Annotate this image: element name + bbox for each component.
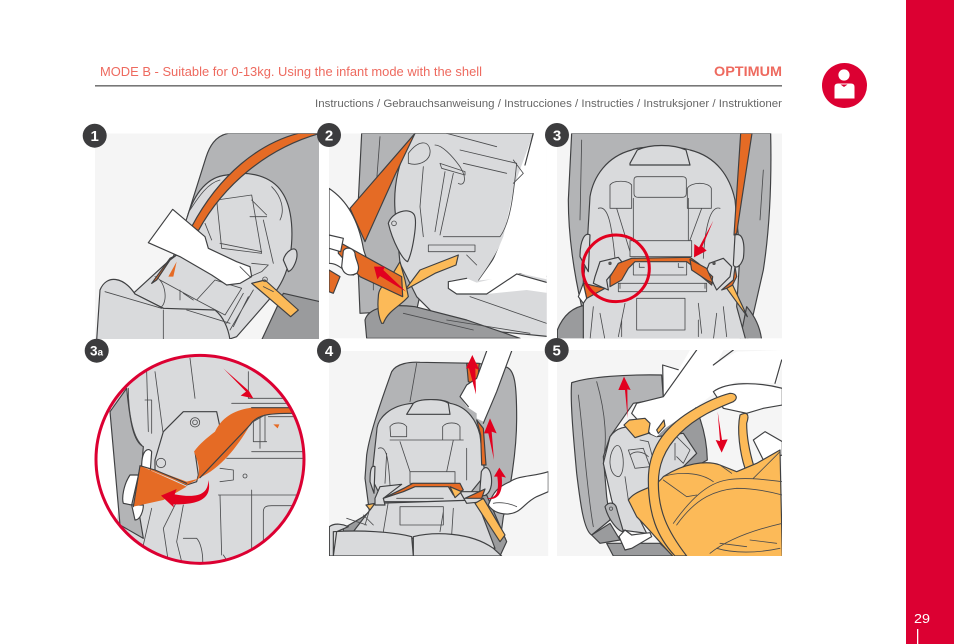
panel 3a: circular detail bbox=[93, 355, 310, 565]
panel 5: attach infant carrier bbox=[557, 350, 782, 557]
page number: 29 bbox=[914, 611, 930, 626]
panel 4: tighten strap upwards bbox=[329, 351, 548, 556]
step badge 3a: 3a bbox=[90, 344, 103, 358]
heading: mode description: MODE B - Suitable for 0-13kg. Using the infant mode with the shell bbox=[100, 65, 482, 79]
icon: person in circle bbox=[822, 63, 867, 108]
step badge 5 bbox=[545, 338, 569, 362]
step badge 3: 3 bbox=[553, 128, 561, 144]
step badge 2 bbox=[317, 123, 341, 147]
panel 2: thread strap with hands bbox=[329, 133, 550, 338]
step badge 4: 4 bbox=[325, 343, 334, 360]
step badge 5: 5 bbox=[553, 342, 561, 360]
panel 1: thread strap through shell bbox=[95, 133, 320, 340]
red side band bbox=[906, 0, 954, 644]
page number bbox=[914, 611, 930, 644]
step badge 1 bbox=[83, 124, 107, 148]
heading: product name: OPTIMUM bbox=[714, 64, 782, 79]
step badge 3 bbox=[545, 123, 569, 147]
step badge 4 bbox=[317, 339, 341, 363]
instructions languages line: Instructions / Gebrauchsanweisung / Instrucciones / Instructies / Instruksjoner / Instruktioner bbox=[315, 98, 782, 110]
step badge 2: 2 bbox=[325, 128, 333, 144]
panel 3: strap over base, with detail circle bbox=[557, 133, 782, 343]
step badge 3a bbox=[85, 339, 109, 363]
step badge 1: 1 bbox=[91, 128, 99, 145]
